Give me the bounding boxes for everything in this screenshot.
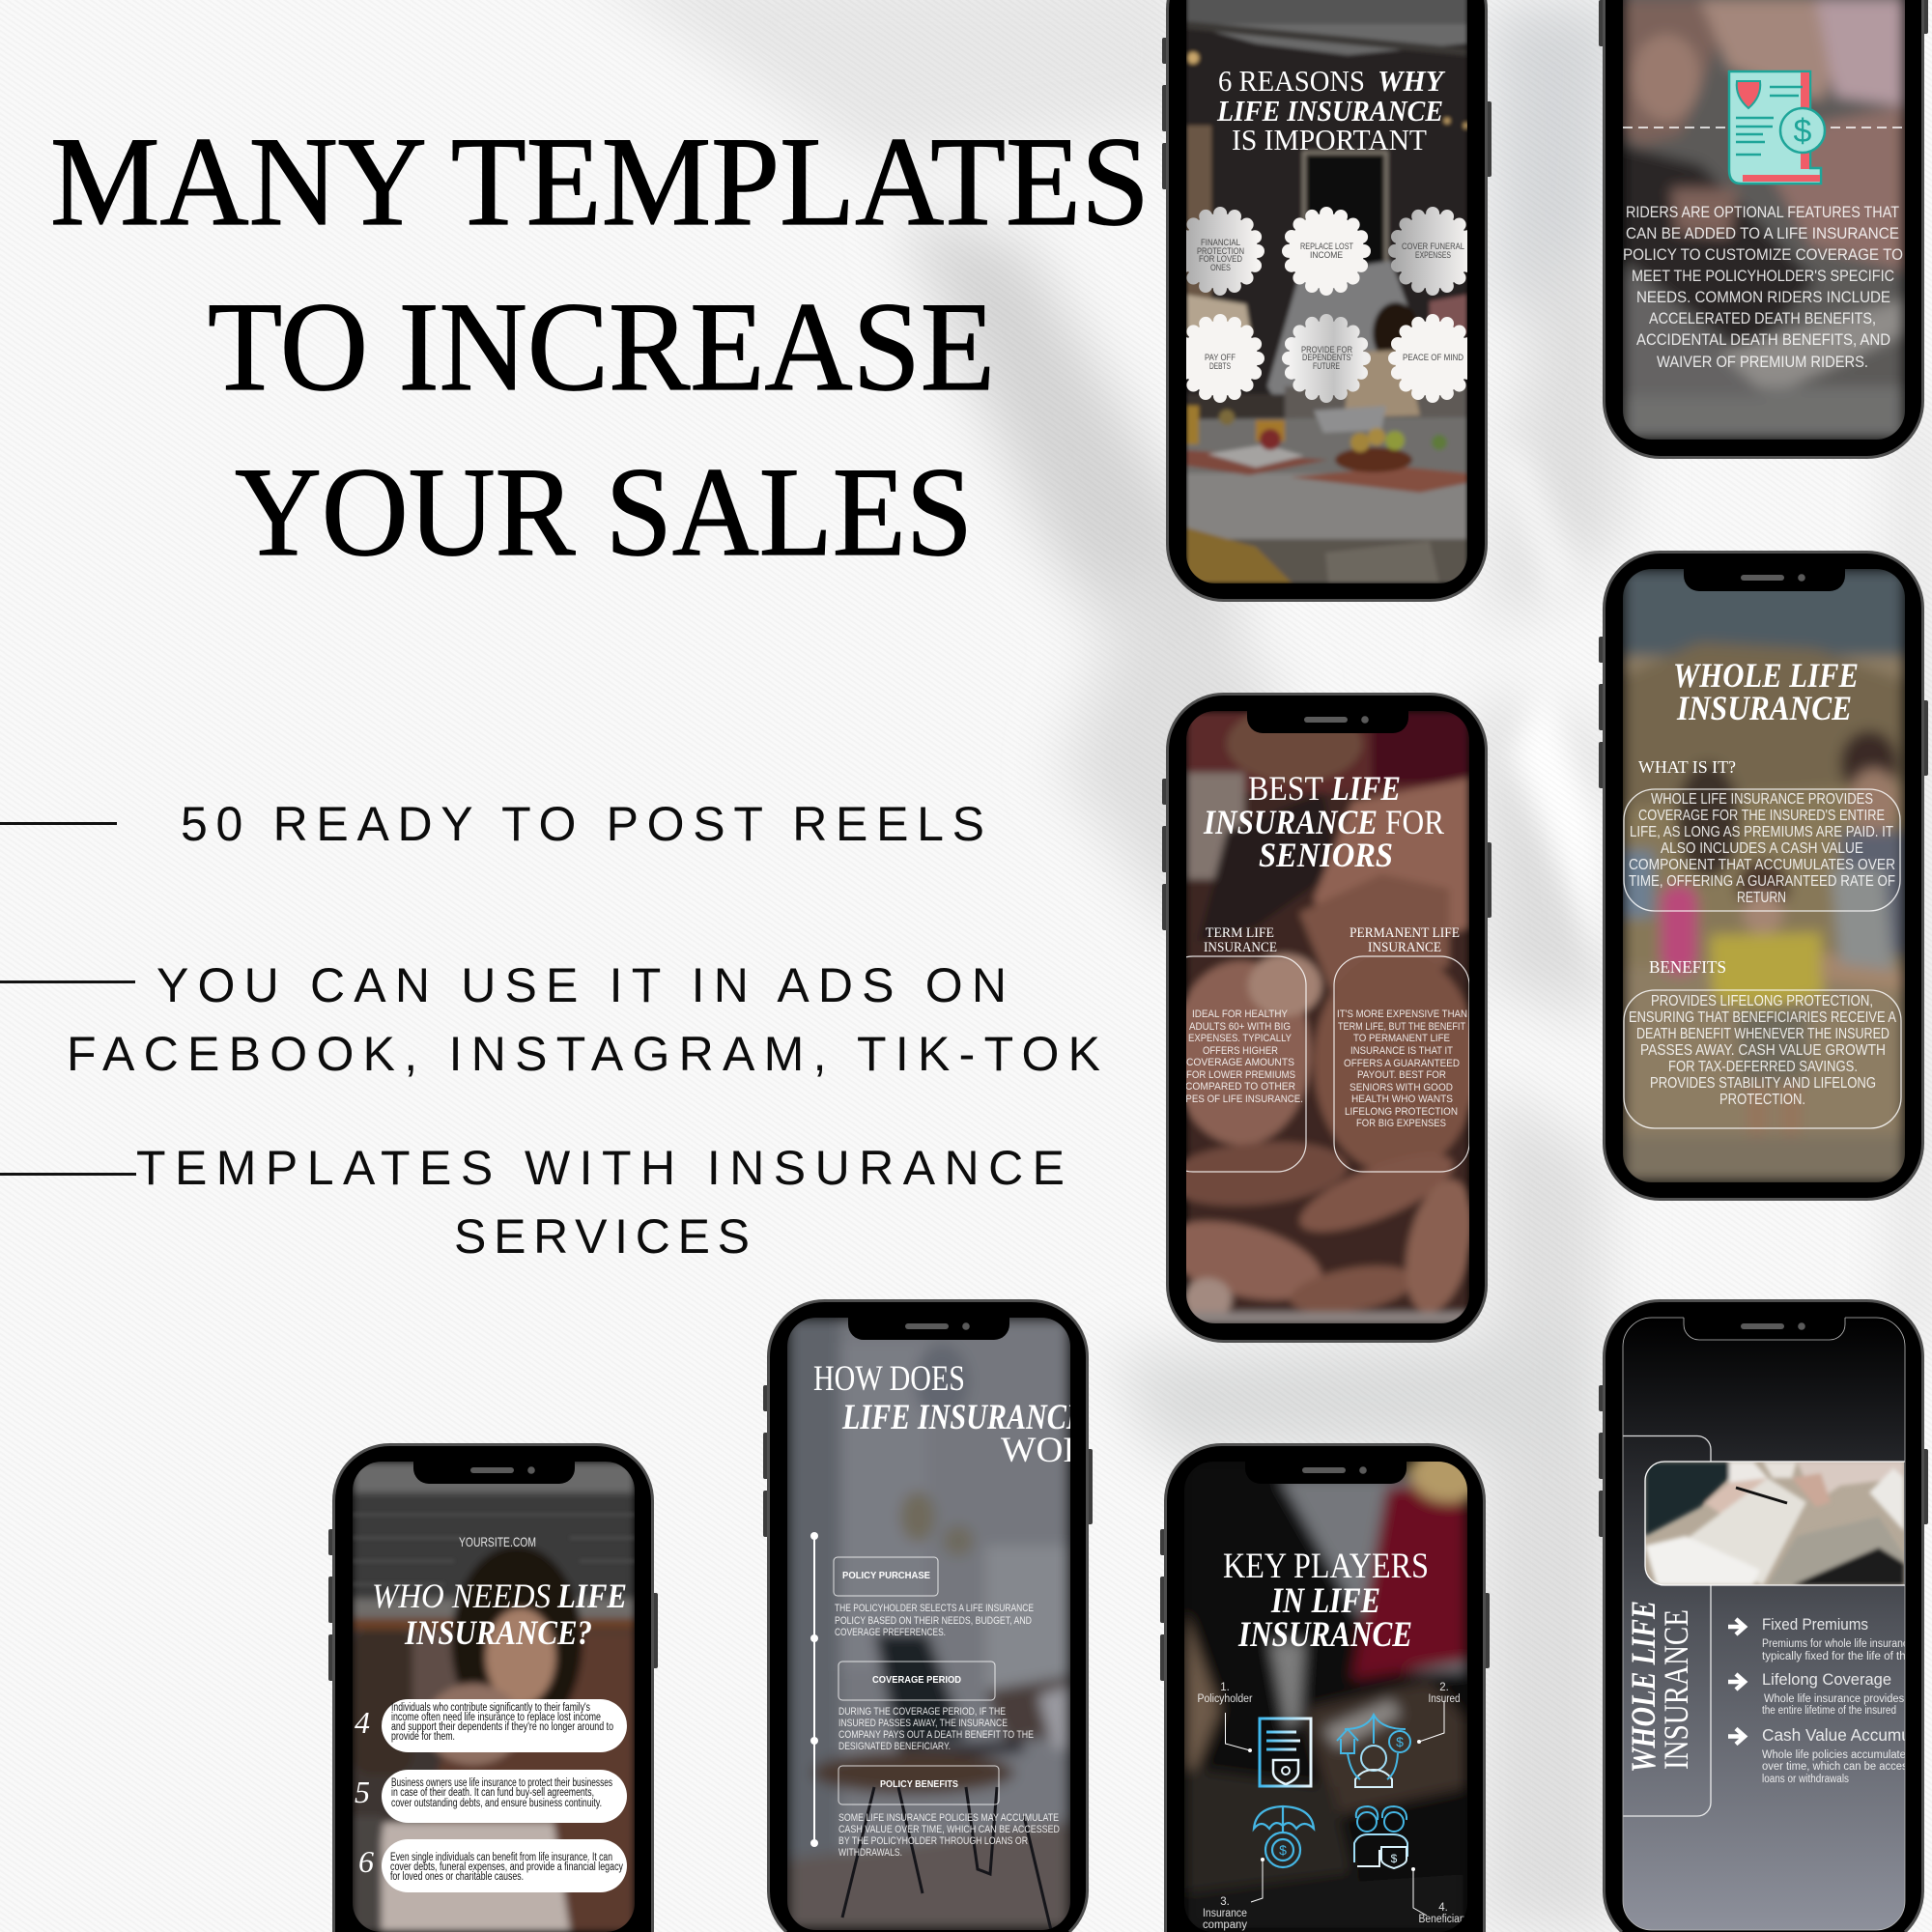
feature: insurance templates: TEMPLATES WITH INSURANCE (136, 1141, 1065, 1195)
item 5: cover outstanding debts, and ensure business continuity. (391, 1798, 602, 1809)
section: benefits: PROVIDES STABILITY AND LIFELONG (1650, 1075, 1876, 1092)
column: term life: TYPES OF LIFE INSURANCE. (1174, 1094, 1303, 1105)
heading: best life insurance: BEST (1248, 769, 1323, 808)
phone: 6 reasons why life insurance is important (1162, 0, 1492, 601)
phone: key players in life insurance (1160, 1444, 1490, 1932)
section: what is it: TIME, OFFERING A GUARANTEED RATE OF (1629, 873, 1895, 890)
item 4: Individuals who contribute significantly to their family's (391, 1702, 590, 1714)
feature: use in ads: FACEBOOK, INSTAGRAM, TIK-TOK (67, 1027, 1100, 1081)
section: benefits: PASSES AWAY. CASH VALUE GROWTH (1640, 1042, 1886, 1059)
step: policy benefits: WITHDRAWALS. (838, 1847, 902, 1859)
column: permanent life: OFFERS A GUARANTEED (1344, 1058, 1460, 1069)
step: coverage period: DESIGNATED BENEFICIARY. (838, 1741, 951, 1752)
reasons badges: PAY OFF (1205, 353, 1236, 363)
icon: beneficiaries: $ (1391, 1852, 1398, 1865)
icon: beneficiaries (1354, 1806, 1407, 1868)
benefit: lifelong coverage: the entire lifetime of the insured (1762, 1705, 1896, 1717)
title: TO INCREASE (208, 275, 995, 417)
step: policy purchase: THE POLICYHOLDER SELECTS A LIFE INSURANCE (835, 1603, 1034, 1614)
section: benefits: PROTECTION. (1719, 1092, 1805, 1108)
title (50, 110, 1150, 582)
item 5: in case of their death. It can fund buy-sell agreements, (391, 1787, 594, 1799)
item 6: cover debts, funeral expenses, and provide a financial legacy (390, 1861, 623, 1873)
leader lines (1225, 1701, 1444, 1916)
feature: insurance templates (0, 1141, 1065, 1264)
item 4: 4 (355, 1705, 370, 1740)
feature: use in ads: YOU CAN USE IT IN ADS ON (156, 958, 1007, 1012)
item 5 (355, 1770, 627, 1823)
heading: how does (813, 1359, 1115, 1470)
reasons badges: PROVIDE FOR (1301, 345, 1352, 355)
column: term life: COVERAGE AMOUNTS (1186, 1057, 1294, 1068)
item 4 (355, 1699, 627, 1752)
column: term life: IDEAL FOR HEALTHY (1192, 1009, 1289, 1020)
feature: 50 ready to post reels: 50 READY TO POST REELS (181, 797, 984, 851)
step: policy purchase: COVERAGE PREFERENCES. (835, 1627, 946, 1638)
section: what is it: LIFE, AS LONG AS PREMIUMS ARE PAID. IT (1630, 824, 1893, 840)
icon: insured family shield (1337, 1715, 1410, 1787)
photo: signing documents (1645, 1462, 1904, 1585)
heading: key players: KEY PLAYERS (1223, 1547, 1429, 1586)
column: permanent life: TO PERMANENT LIFE (1353, 1033, 1450, 1044)
body text: riders: CAN BE ADDED TO A LIFE INSURANCE (1626, 224, 1899, 242)
column: term life: FOR LOWER PREMIUMS (1186, 1069, 1295, 1081)
reasons badges: FOR LOVED (1199, 254, 1242, 265)
heading: 6 reasons (1217, 71, 1445, 151)
section: what is it: WHOLE LIFE INSURANCE PROVIDES (1651, 791, 1873, 808)
body text: riders: NEEDS. COMMON RIDERS INCLUDE (1636, 288, 1890, 306)
panel outline (1622, 1435, 1711, 1816)
column: term life: INSURANCE (1204, 940, 1277, 955)
heading: best life insurance: INSURANCE (1203, 803, 1378, 841)
step: coverage period: COMPANY PAYS OUT A DEATH BENEFIT TO THE (838, 1729, 1034, 1741)
heading: how does: HOW DOES (813, 1359, 965, 1399)
heading: best life insurance: LIFE (1330, 769, 1401, 808)
body text: riders (1623, 203, 1903, 371)
step: policy benefits: BY THE POLICYHOLDER THROUGH LOANS OR (838, 1835, 1028, 1847)
column: term life: OFFERS HIGHER (1203, 1045, 1278, 1057)
feature: use in ads (0, 958, 1100, 1081)
benefit: lifelong coverage (1728, 1670, 1932, 1717)
title: MANY TEMPLATES (50, 110, 1150, 252)
player labels: Insured (1428, 1693, 1461, 1705)
benefit: fixed premiums (1728, 1615, 1932, 1662)
section: what is it: RETURN (1737, 890, 1786, 906)
body text: riders: ACCELERATED DEATH BENEFITS, (1649, 309, 1876, 327)
step: policy purchase: POLICY PURCHASE (842, 1570, 930, 1581)
heading: key players: INSURANCE (1237, 1615, 1412, 1655)
reasons badges: DEBTS (1209, 361, 1231, 372)
benefit: fixed premiums: Fixed Premiums (1762, 1615, 1868, 1634)
heading: 6 reasons: 6 REASONS (1218, 64, 1365, 98)
heading: who needs (374, 1584, 626, 1644)
item 6: Even single individuals can benefit from life insurance. It can (390, 1852, 612, 1863)
vertical heading (1624, 1601, 1695, 1773)
player labels: 2. (1439, 1682, 1449, 1693)
step: policy benefits: POLICY BENEFITS (880, 1778, 958, 1790)
column: term life: COMPARED TO OTHER (1185, 1081, 1295, 1093)
step: policy benefits: CASH VALUE OVER TIME, WHICH CAN BE ACCESSED (838, 1824, 1060, 1835)
column: term life: TERM LIFE (1206, 925, 1274, 941)
benefit: cash value (1728, 1725, 1932, 1785)
item 5: Business owners use life insurance to protect their businesses (391, 1777, 612, 1789)
item 4: provide for them. (391, 1731, 455, 1743)
reasons badges: REPLACE LOST (1300, 242, 1353, 252)
reasons badges: FUTURE (1313, 361, 1340, 372)
player labels: Policyholder (1198, 1693, 1253, 1705)
column: permanent life (1334, 925, 1469, 1172)
body text: riders: ACCIDENTAL DEATH BENEFITS, AND (1636, 330, 1890, 349)
icon: umbrella coin (1254, 1806, 1314, 1867)
phone: whole life insurance dark (1599, 1300, 1932, 1932)
phone: best life insurance for seniors (1153, 694, 1492, 1341)
section: benefits (1624, 957, 1901, 1128)
column: permanent life: TERM LIFE, BUT THE BENEFIT (1338, 1021, 1465, 1033)
player labels: 1. (1220, 1682, 1230, 1693)
heading: 6 reasons: WHY (1378, 64, 1446, 98)
heading: who needs: INSURANCE? (404, 1613, 592, 1652)
feature: insurance templates: SERVICES (454, 1209, 750, 1264)
heading: whole life insurance: INSURANCE (1676, 689, 1852, 727)
icon: umbrella coin: $ (1279, 1842, 1287, 1858)
section: what is it (1624, 757, 1900, 911)
heading: whole life insurance: WHOLE LIFE (1673, 656, 1859, 695)
step: policy purchase (834, 1557, 1034, 1638)
section: what is it: ALSO INCLUDES A CASH VALUE (1661, 840, 1863, 857)
column: permanent life: LIFELONG PROTECTION (1345, 1106, 1458, 1118)
dashed line (1623, 127, 1905, 128)
step: coverage period: INSURED PASSES AWAY, THE INSURANCE (838, 1718, 1008, 1729)
reasons badges: FINANCIAL (1201, 238, 1240, 248)
phone: whole life insurance beach (1599, 553, 1928, 1200)
phone: how does life insurance work (763, 1300, 1115, 1932)
step: coverage period (838, 1662, 1034, 1752)
heading: key players: IN LIFE (1270, 1581, 1380, 1621)
heading: whole life insurance (1675, 664, 1858, 721)
heading: best life insurance: SENIORS (1259, 836, 1393, 874)
heading: how does: WORK (1001, 1431, 1115, 1470)
reasons badges: INCOME (1310, 250, 1343, 261)
item 4: income often need life insurance to replace lost income (391, 1712, 601, 1723)
column: permanent life: HEALTH WHO WANTS (1351, 1094, 1453, 1105)
vertical heading: WHOLE LIFE (1624, 1601, 1662, 1773)
section: benefits: BENEFITS (1649, 957, 1726, 977)
icon: insurance document with dollar: $ (1794, 113, 1812, 150)
reasons badges: DEPENDENTS' (1302, 353, 1352, 363)
icon: policy document (1260, 1719, 1311, 1786)
item 5: 5 (355, 1775, 370, 1809)
step: coverage period: COVERAGE PERIOD (872, 1674, 961, 1686)
heading: best life insurance (1204, 777, 1444, 867)
section: what is it: WHAT IS IT? (1638, 757, 1736, 777)
heading: 6 reasons: LIFE INSURANCE (1216, 94, 1443, 128)
column: permanent life: PERMANENT LIFE (1350, 925, 1460, 941)
icon: insured family shield: $ (1396, 1734, 1404, 1749)
reasons badges: PEACE OF MIND (1403, 353, 1463, 363)
benefit: cash value: loans or withdrawals (1762, 1774, 1849, 1785)
reasons badges: ONES (1210, 263, 1231, 273)
column: term life (1186, 927, 1307, 1173)
body text: riders: POLICY TO CUSTOMIZE COVERAGE TO (1623, 245, 1903, 264)
item 6: 6 (358, 1844, 374, 1879)
icon: insurance document with dollar (1729, 71, 1825, 184)
heading: who needs: WHO NEEDS (372, 1577, 551, 1615)
step: policy benefits (838, 1766, 1060, 1859)
reasons badges (1182, 213, 1470, 396)
benefit: lifelong coverage: Lifelong Coverage (1762, 1670, 1891, 1689)
heading: key players (1223, 1547, 1429, 1655)
player labels: Insurance (1203, 1908, 1247, 1919)
reasons badges: COVER FUNERAL (1402, 242, 1464, 252)
heading: who needs: LIFE (556, 1577, 627, 1615)
reasons badges: PROTECTION (1197, 246, 1244, 257)
heading: how does: LIFE INSURANCE (841, 1398, 1086, 1437)
reasons badges: EXPENSES (1415, 250, 1451, 261)
section: what is it: COMPONENT THAT ACCUMULATES OVER (1629, 857, 1895, 873)
column: permanent life: IT'S MORE EXPENSIVE THAN (1337, 1009, 1467, 1020)
player labels: company (1203, 1919, 1247, 1931)
column: term life: EXPENSES. TYPICALLY (1188, 1033, 1293, 1044)
step: policy purchase: POLICY BASED ON THEIR NEEDS, BUDGET, AND (835, 1615, 1032, 1627)
column: permanent life: SENIORS WITH GOOD (1350, 1082, 1453, 1094)
title: YOUR SALES (235, 440, 973, 582)
step: policy benefits: SOME LIFE INSURANCE POLICIES MAY ACCUMULATE (838, 1812, 1059, 1824)
player labels: 3. (1220, 1896, 1230, 1908)
player labels (1198, 1682, 1468, 1931)
phone: riders (1599, 0, 1928, 458)
body text: riders: WAIVER OF PREMIUM RIDERS. (1657, 353, 1868, 371)
vertical heading: INSURANCE (1657, 1609, 1695, 1770)
site label: YOURSITE.COM (459, 1534, 536, 1549)
phone: who needs life insurance (328, 1445, 658, 1932)
section: benefits: PROVIDES LIFELONG PROTECTION, (1651, 993, 1873, 1009)
column: permanent life: INSURANCE IS THAT IT (1350, 1045, 1453, 1057)
heading: best life insurance: FOR (1385, 803, 1444, 841)
column: permanent life: INSURANCE (1368, 940, 1441, 955)
section: what is it: COVERAGE FOR THE INSURED'S ENTIRE (1638, 808, 1885, 824)
item 6 (358, 1839, 627, 1892)
timeline (810, 1532, 818, 1847)
item 6: for loved ones or charitable causes. (390, 1871, 524, 1883)
column: term life: ADULTS 60+ WITH BIG (1189, 1021, 1291, 1033)
column: permanent life: FOR BIG EXPENSES (1356, 1118, 1446, 1129)
player labels: Beneficiary (1418, 1914, 1468, 1925)
heading: 6 reasons: IS IMPORTANT (1232, 123, 1427, 156)
player labels: 4. (1438, 1902, 1448, 1914)
item 4: and support their dependents if they're no longer around to (391, 1721, 613, 1733)
step: coverage period: DURING THE COVERAGE PERIOD, IF THE (838, 1706, 1006, 1718)
section: benefits: FOR TAX-DEFERRED SAVINGS. (1668, 1059, 1858, 1075)
column: permanent life: PAYOUT. BEST FOR (1357, 1069, 1446, 1081)
